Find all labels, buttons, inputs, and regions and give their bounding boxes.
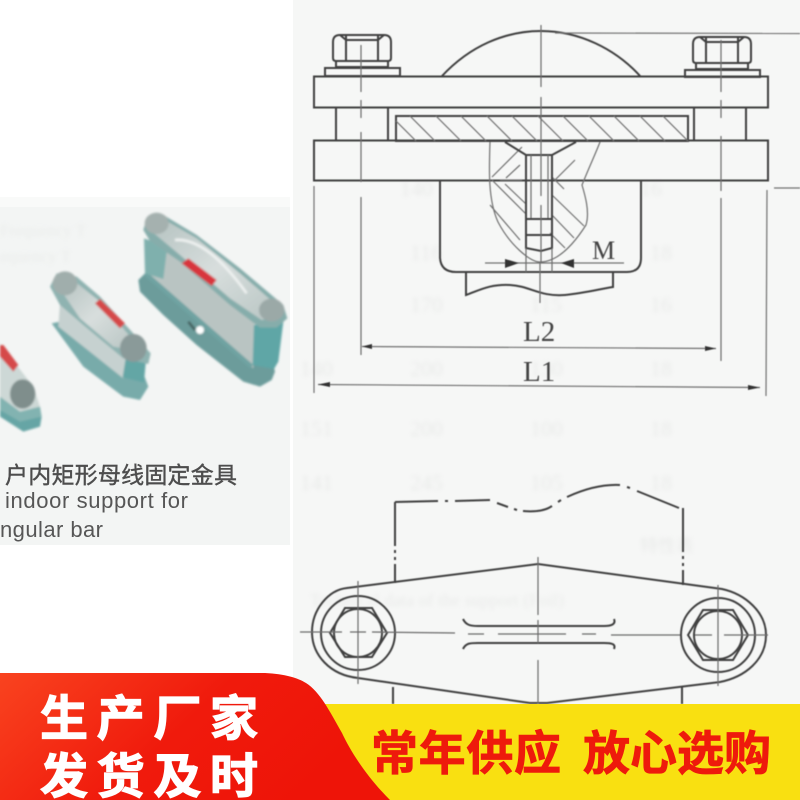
dimension: L1: L1 [523, 356, 555, 388]
faint bleed-through text on photo [0, 221, 87, 266]
drawing: side section view [314, 25, 800, 396]
faint bleed-through spec table: 140 [300, 356, 333, 381]
faint bleed-through spec table: 140 [400, 176, 433, 201]
drawing: plan view [300, 485, 768, 704]
banner: yellow strip [300, 704, 800, 800]
left bolt nut and washer [325, 35, 400, 76]
banner heading: manufacturer: 生产厂家 [40, 693, 258, 746]
faint bleed-through spec table: 245 [410, 470, 443, 495]
section hatching [490, 147, 584, 248]
faint bleed-through spec table: 200 [410, 416, 443, 441]
left bolt plan [321, 596, 395, 670]
product: large busbar clamp [138, 213, 287, 387]
left and right spacers [336, 107, 746, 141]
dimension: M [485, 236, 624, 272]
dome of clamp plate [442, 31, 641, 77]
faint bleed-through spec table: 116 [410, 240, 442, 265]
right bolt nut and washer [685, 37, 760, 77]
faint bleed-through spec table: 18 [650, 416, 672, 441]
faint bleed-through spec table: 170 [410, 292, 443, 317]
dash-dotted conductor outline [395, 485, 679, 511]
dimension: L1 [318, 356, 760, 390]
faint bleed-through spec table: 200 [410, 356, 443, 381]
faint bleed-through spec table: 18 [650, 470, 672, 495]
dimension line at dome [555, 32, 800, 34]
caption: English product name: indoor support for [5, 488, 188, 513]
faint bleed-through spec table: 18 [650, 356, 672, 381]
faint bleed-through spec table: 特性表 [640, 536, 694, 556]
faint bleed-through spec table: 100 [530, 416, 563, 441]
faint bleed-through spec table: 151 [300, 416, 333, 441]
faint bleed-through spec table: Technical data of the support (Foil) [310, 590, 564, 611]
faint bleed-through spec table: 16 [640, 176, 662, 201]
banner slogan: year-round supply: 常年供应 [371, 727, 561, 780]
caption: English product name: ngular bar [0, 517, 103, 542]
dimension: L2: L2 [523, 316, 555, 348]
central slot lines [463, 619, 615, 649]
faint bleed-through spec table [300, 176, 694, 611]
faint bleed-through text on photo: Frequency T [0, 221, 87, 240]
faint bleed-through spec table: 105 [530, 470, 563, 495]
section break outline [489, 142, 600, 262]
panel: technical drawing sheet [293, 0, 800, 704]
faint bleed-through text on photo: equency T [0, 247, 72, 266]
bottom plate [314, 140, 768, 180]
banner: red manufacturer tab [0, 673, 390, 800]
lower body [440, 181, 641, 272]
dimension: M: M [592, 236, 615, 265]
product: small busbar clamp, cropped [0, 343, 42, 432]
product: medium busbar clamp [50, 271, 151, 400]
banner slogan: buy with confidence: 放心选购 [583, 727, 771, 780]
faint bleed-through spec table: 141 [300, 470, 333, 495]
faint bleed-through spec table: 130 [530, 356, 563, 381]
dimension: L2 [362, 316, 716, 351]
faint bleed-through spec table: 16 [650, 292, 672, 317]
right bolt plan [681, 598, 755, 672]
plan view centre lines [300, 632, 768, 635]
top plate [314, 76, 768, 108]
centre lines [540, 25, 541, 303]
panel: product photo [0, 197, 290, 545]
hatched busbar [396, 116, 688, 141]
conductor sides through plate [393, 502, 683, 704]
clamp plate outline [312, 564, 766, 703]
conductor stub with wavy break [466, 273, 613, 295]
caption: Chinese product name: 户内矩形母线固定金具 [5, 462, 237, 488]
extension lines [314, 186, 800, 396]
faint bleed-through spec table: 18 [650, 240, 672, 265]
countersunk screw [505, 142, 576, 251]
faint bleed-through spec table: 115 [530, 292, 562, 317]
